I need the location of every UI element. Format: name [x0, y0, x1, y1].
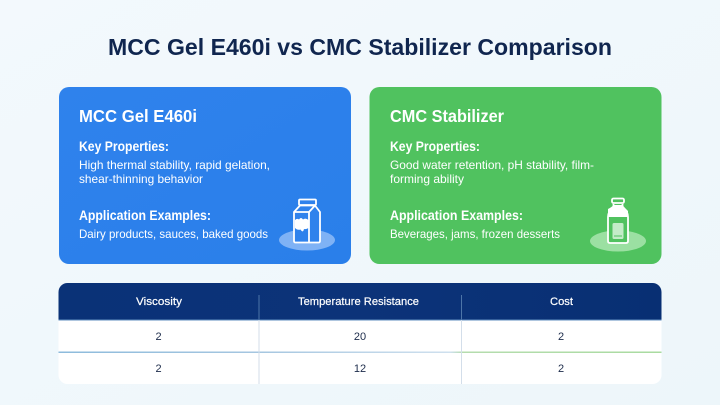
- column headers: [136, 296, 573, 308]
- column headers: Cost: [550, 296, 573, 308]
- icon: milk carton: [279, 200, 335, 250]
- panel: MCC Gel E460i: [59, 87, 351, 264]
- comparison table: [58, 283, 662, 384]
- application examples heading: Application Examples:: [79, 208, 211, 223]
- row 1 values: 2: [155, 331, 162, 343]
- key properties text: [390, 158, 594, 186]
- icon: bottle: [590, 198, 646, 252]
- key properties text: [79, 158, 270, 186]
- key properties heading: Key Properties:: [390, 139, 480, 154]
- panel heading: MCC Gel E460i: MCC Gel E460i: [79, 106, 197, 126]
- key properties text: Good water retention, pH stability, film-: [390, 158, 594, 172]
- row 2 values: [155, 363, 564, 375]
- row 2 values: 12: [354, 363, 366, 375]
- application examples text: Beverages, jams, frozen desserts: [390, 227, 560, 241]
- table header row: [58, 283, 662, 320]
- application examples heading: Application Examples:: [390, 208, 523, 223]
- panel heading: CMC Stabilizer: CMC Stabilizer: [390, 106, 504, 126]
- row 1 values: 2: [558, 331, 564, 343]
- title: MCC Gel E460i vs CMC Stabilizer Comparison: [108, 34, 612, 60]
- column headers: Temperature Resistance: [298, 296, 419, 308]
- row 2 values: 2: [155, 363, 162, 375]
- infographic canvas: [58, 38, 662, 384]
- key properties text: High thermal stability, rapid gelation,: [79, 158, 270, 172]
- column headers: Viscosity: [136, 296, 183, 308]
- row 2 values: 2: [558, 363, 564, 375]
- row 1 values: 20: [354, 331, 366, 343]
- key properties text: forming ability: [390, 172, 464, 186]
- key properties text: shear-thinning behavior: [79, 172, 203, 186]
- application examples text: Dairy products, sauces, baked goods: [79, 227, 268, 241]
- key properties heading: Key Properties:: [79, 139, 169, 154]
- panel: CMC Stabilizer: [370, 87, 662, 264]
- row 1 values: [155, 331, 564, 343]
